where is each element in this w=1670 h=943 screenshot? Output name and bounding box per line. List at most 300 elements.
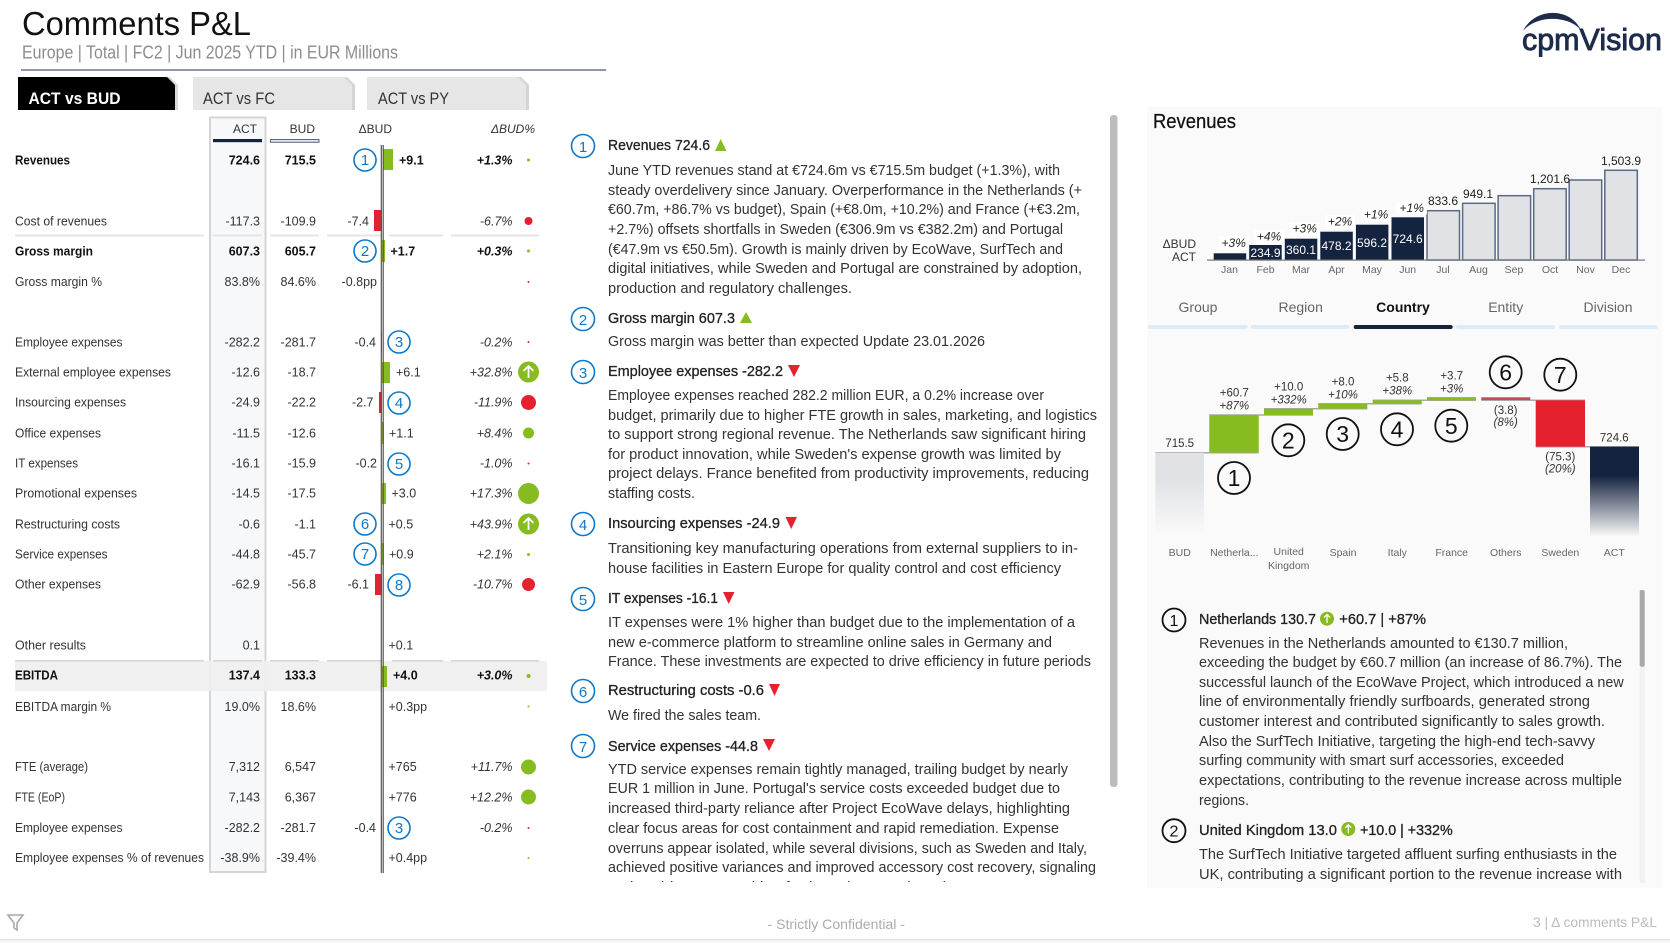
total value labels	[1428, 154, 1641, 208]
comment: Netherlands: surfing community with smart surf accessories, exceeded	[1199, 753, 1564, 769]
tabs: breakdown dimension: Region	[1279, 299, 1323, 315]
comment 1: Revenues	[572, 134, 1082, 297]
comment 7: Service expenses: 7	[579, 739, 587, 756]
bridge category labels: Kingdom	[1268, 560, 1310, 572]
comment 1: Revenues: production and regulatory challenges.	[608, 281, 852, 297]
chart baseline	[1207, 260, 1645, 261]
row: Employee expenses: -0.4	[354, 336, 376, 350]
bridge value labels: +332%	[1271, 394, 1307, 406]
row: IT expenses: -16.1	[232, 456, 260, 470]
row: Employee expenses % of revenues: +0.4pp	[388, 851, 427, 865]
footer confidentiality note: - Strictly Confidential -	[768, 916, 905, 932]
row: Service expenses: +0.9	[389, 548, 414, 562]
comment 7: Service expenses: Service expenses -44.8	[608, 738, 758, 755]
comment: United Kingdom: The SurfTech Initiative targeted affluent surfing enthusiasts in the	[1199, 847, 1617, 863]
row: EBITDA: +3.0%	[477, 668, 512, 682]
panel: P&L table	[15, 118, 547, 873]
row separator above EBITDA	[15, 660, 539, 662]
icon: filter funnel	[8, 915, 23, 930]
month axis labels: Nov	[1576, 264, 1596, 276]
white value labels in bars: 596.2	[1357, 236, 1387, 250]
row: Gross margin	[15, 240, 530, 262]
comment 3: Employee expenses: for product innovation, while Sweden's expense growth was limited by	[608, 447, 1062, 463]
country comments scrollbar	[1640, 590, 1645, 883]
month axis labels: Sep	[1505, 264, 1523, 276]
bridge value labels: (8%)	[1494, 417, 1518, 429]
month axis labels: Feb	[1256, 264, 1275, 276]
country comments	[1162, 608, 1624, 883]
comment 6: Restructuring costs: We fired the sales team.	[608, 708, 761, 724]
row: Other expenses: Other expenses	[15, 578, 101, 592]
total value labels: 1,503.9	[1601, 154, 1641, 168]
row: FTE (average)	[15, 760, 536, 774]
comment 1: Revenues: €60.7m, +86.7% vs budget), Spain (+€8.0m, +10.2%) and France (+€3.2m,	[608, 202, 1080, 218]
comment: Netherlands: successful launch of the EcoWave Project, which introduced a new	[1199, 675, 1624, 691]
white value labels in bars	[1250, 232, 1423, 260]
row: Promotional expenses: +3.0	[392, 486, 416, 500]
bridge value labels: +10%	[1328, 389, 1358, 401]
bridge category labels: Italy	[1388, 547, 1408, 559]
comment: United Kingdom: United Kingdom 13.0	[1199, 822, 1337, 839]
row: Revenues: 724.6	[229, 154, 260, 168]
row: Service expenses: +2.1%	[477, 548, 512, 562]
row: Service expenses: Service expenses	[15, 548, 108, 562]
bridge category labels: Others	[1490, 547, 1521, 559]
title: Comments P&L	[22, 5, 251, 42]
comment: Netherlands: +60.7 | +87%	[1339, 611, 1426, 628]
row: EBITDA: 137.4	[229, 668, 260, 682]
table column headers: ΔBUD	[359, 122, 392, 136]
comment 1: Revenues: (€47.9m vs €50.5m). Growth is mainly driven by EcoWave, SurfTech and	[608, 242, 1063, 258]
row: Service expenses: -45.7	[288, 548, 316, 562]
row: Insourcing expenses: -24.9	[232, 396, 260, 410]
comment 3: Employee expenses: budget, primarily due to higher FTE growth in sales, marketing, and logistics	[608, 408, 1097, 424]
header rule	[21, 69, 606, 71]
row: Office expenses: -12.6	[288, 426, 316, 440]
row: FTE (average): 7,312	[229, 760, 260, 774]
actual bars	[1214, 217, 1424, 260]
comment: Netherlands: exceeding the budget by €60.7 million (an increase of 86.7%). The	[1199, 655, 1622, 671]
comment 2: Gross margin: 2	[579, 312, 587, 329]
row: Cost of revenues: -6.7%	[480, 214, 512, 228]
tab: ACT vs PY	[367, 77, 529, 110]
legend labels	[1163, 237, 1197, 264]
row: IT expenses: 5	[395, 456, 403, 473]
table column headers: ΔBUD%	[490, 122, 535, 136]
comment 7: Service expenses: achieved positive variances and improved accessory cost recovery, signaling	[608, 860, 1096, 876]
delta percent labels: +3%	[1293, 222, 1317, 236]
row: Employee expenses: -281.7	[281, 336, 316, 350]
row: IT expenses: IT expenses	[15, 456, 78, 470]
month axis labels: Dec	[1612, 264, 1630, 276]
comment: Netherlands: 1	[1170, 613, 1179, 630]
row: Employee expenses: -0.2%	[480, 336, 512, 350]
bridge value labels: (3.8)	[1494, 405, 1518, 417]
row: FTE (EoP): +12.2%	[470, 790, 512, 804]
bridge value labels: (20%)	[1545, 464, 1576, 476]
comment: United Kingdom: UK, contributing a significant portion to the revenue increase with	[1199, 867, 1622, 883]
comment: Netherlands: Also the SurfTech Initiative, targeting the high-end tech-savvy	[1199, 734, 1596, 750]
row: Revenues: 1	[361, 152, 369, 169]
bridge category labels: United	[1274, 546, 1304, 558]
row: FTE (average): 6,547	[285, 760, 316, 774]
bridge value labels: +3%	[1440, 384, 1463, 396]
numbered markers: 4	[1391, 416, 1404, 442]
row: Revenues	[15, 149, 530, 171]
row: Insourcing expenses: -11.9%	[474, 396, 512, 410]
comment 5: IT expenses	[572, 588, 1091, 670]
bridge category labels: France	[1435, 547, 1468, 559]
row: Cost of revenues: -109.9	[281, 214, 316, 228]
delta percent labels: +2%	[1328, 215, 1353, 229]
bridge category labels	[1169, 546, 1625, 572]
row: Employee expenses memo: -282.2	[225, 821, 260, 835]
row: IT expenses: -0.2	[355, 456, 377, 470]
month axis labels	[1221, 264, 1630, 276]
row: EBITDA margin %: 18.6%	[281, 700, 316, 714]
row: Cost of revenues: -7.4	[347, 214, 369, 228]
comment 5: IT expenses: France. These investments are expected to drive efficiency in future periods	[608, 654, 1091, 670]
bridge category labels: BUD	[1169, 547, 1191, 559]
row: Promotional expenses: -14.5	[232, 486, 260, 500]
comment 7: Service expenses: clear focus areas for cost containment and rapid remediation. Expense	[608, 821, 1059, 837]
row: EBITDA margin %: 19.0%	[225, 700, 260, 714]
row: Revenues: Revenues	[15, 154, 70, 168]
numbered markers: 1	[1228, 465, 1240, 491]
month axis labels: Jan	[1221, 264, 1238, 276]
row: IT expenses: -15.9	[288, 456, 316, 470]
row: Service expenses: 7	[361, 546, 369, 563]
row: Restructuring costs: Restructuring costs	[15, 518, 120, 532]
row: EBITDA: +4.0	[393, 668, 418, 682]
row: FTE (average): +11.7%	[471, 760, 512, 774]
row: Restructuring costs	[15, 513, 539, 535]
comment 5: IT expenses: new e-commerce platform to streamline online sales in Germany and	[608, 635, 1052, 651]
row: Promotional expenses: -17.5	[288, 486, 316, 500]
row: FTE (average): +765	[388, 760, 417, 774]
row: Restructuring costs: -1.1	[294, 518, 316, 532]
bridge value labels: +10.0	[1274, 382, 1303, 394]
chart: monthly revenue columns	[1163, 154, 1645, 276]
subtitle: Europe | Total | FC2 | Jun 2025 YTD | in EUR Millions	[22, 42, 398, 62]
tab: ACT vs BUD	[18, 77, 178, 110]
logo: cpmVision: cpmVision	[1522, 22, 1662, 57]
row: Gross margin %: -0.8pp	[342, 275, 377, 289]
row: EBITDA margin %: EBITDA margin %	[15, 700, 111, 714]
numbered markers	[1218, 356, 1576, 494]
row: Promotional expenses	[15, 483, 539, 504]
numbered markers: 7	[1554, 362, 1567, 388]
comment 5: IT expenses: 5	[579, 592, 587, 609]
budget bars	[1427, 170, 1637, 260]
bridge category labels: Spain	[1330, 547, 1357, 559]
comment: Netherlands: regions.	[1199, 793, 1249, 809]
row: External employee expenses	[15, 362, 539, 383]
row: Gross margin: 2	[361, 243, 369, 260]
EBITDA row band	[15, 661, 547, 691]
row: EBITDA	[15, 666, 530, 687]
comment 5: IT expenses: IT expenses were 1% higher than budget due to the implementation of a	[608, 615, 1076, 631]
comment 6: Restructuring costs: Restructuring costs -0.6	[608, 682, 764, 699]
row: Employee expenses memo: -0.2%	[480, 821, 512, 835]
month axis labels: Oct	[1542, 264, 1558, 276]
tabs: breakdown dimension: Country	[1376, 299, 1430, 315]
bridge category labels: ACT	[1604, 547, 1625, 559]
chart: revenue bridge by country	[1155, 356, 1639, 572]
row: Office expenses: Office expenses	[15, 426, 101, 440]
bridge value labels: +38%	[1382, 385, 1412, 397]
row: Other results: +0.1	[388, 638, 413, 652]
comment 5: IT expenses: IT expenses -16.1	[608, 590, 718, 607]
comment 3: Employee expenses: 3	[579, 365, 587, 382]
row: External employee expenses: +6.1	[396, 366, 421, 380]
comment: Netherlands: Netherlands 130.7	[1199, 611, 1316, 628]
row: Gross margin: Gross margin	[15, 244, 93, 258]
comment 1: Revenues: +2.7%) offsets shortfalls in Sweden (€306.9m vs €382.2m) and Portugal	[608, 222, 1063, 238]
comment: United Kingdom: 2	[1170, 824, 1179, 841]
row: External employee expenses: +32.8%	[470, 366, 512, 380]
row: Employee expenses memo	[15, 817, 530, 839]
tab: ACT vs PY: ACT vs PY	[378, 89, 449, 108]
month axis labels: Jun	[1399, 264, 1416, 276]
numbered markers: 2	[1282, 428, 1295, 454]
row: Employee expenses memo: -281.7	[281, 821, 316, 835]
panel heading: Revenues	[1153, 111, 1236, 133]
numbered markers: 3	[1336, 421, 1349, 447]
row: External employee expenses: -18.7	[288, 366, 316, 380]
row: Insourcing expenses: Insourcing expenses	[15, 396, 126, 410]
comment 1: Revenues: steady overdelivery since January. Overperformance in the Netherlands (+	[608, 183, 1082, 199]
comment 3: Employee expenses: project delays. France benefited from productivity improvements, reducing	[608, 466, 1089, 482]
row: Restructuring costs: +43.9%	[470, 518, 512, 532]
tabs: breakdown dimension: Division	[1583, 299, 1633, 315]
row: EBITDA: 133.3	[285, 668, 316, 682]
row: Office expenses: +8.4%	[477, 426, 512, 440]
row: Gross margin %: 83.8%	[225, 275, 260, 289]
row: Insourcing expenses: -2.7	[352, 396, 374, 410]
comment 3: Employee expenses: to support strong regional revenue. The Netherlands saw significant hiring	[608, 427, 1086, 443]
row: Employee expenses: Employee expenses	[15, 336, 122, 350]
row: Revenues: +1.3%	[477, 154, 512, 168]
row: Promotional expenses: Promotional expenses	[15, 486, 137, 500]
comment 4: Insourcing expenses	[572, 512, 1078, 577]
row: Other expenses: -6.1	[347, 578, 369, 592]
row: EBITDA: EBITDA	[15, 668, 58, 682]
row: Employee expenses: 3	[395, 334, 403, 351]
row: Employee expenses	[15, 331, 530, 353]
delta percent labels: +1%	[1364, 208, 1389, 222]
comment 6: Restructuring costs: 6	[579, 684, 587, 701]
legend labels: ACT	[1172, 250, 1197, 264]
table column headers: ACT	[233, 122, 258, 136]
comments scrollbar	[1110, 115, 1118, 787]
row: Gross margin: +1.7	[390, 244, 415, 258]
row: Employee expenses % of revenues: Employee expenses % of revenues	[15, 851, 204, 865]
total value labels: 949.1	[1463, 187, 1493, 201]
comment 3: Employee expenses: Employee expenses -282.2	[608, 363, 783, 380]
row: Other expenses: -56.8	[288, 578, 316, 592]
row: Gross margin %: Gross margin %	[15, 275, 102, 289]
numbered markers: 5	[1445, 413, 1458, 439]
comment: Netherlands: expectations, contributing to the revenue increase across multiple	[1199, 773, 1622, 789]
comment 4: Insourcing expenses: 4	[579, 517, 587, 534]
row: FTE (EoP): 7,143	[229, 790, 260, 804]
white value labels in bars: 360.1	[1286, 243, 1316, 257]
comment 7: Service expenses: actionable opportunities for broader margin enhancement.	[608, 880, 1028, 896]
panel background	[1147, 107, 1662, 888]
row: Office expenses	[15, 422, 534, 444]
month axis labels: Jul	[1436, 264, 1450, 276]
row: Other results: Other results	[15, 638, 86, 652]
row: Insourcing expenses: 4	[395, 395, 403, 412]
white value labels in bars: 724.6	[1393, 232, 1423, 246]
delta percent labels: +3%	[1222, 236, 1246, 250]
row: Insourcing expenses: -22.2	[288, 396, 316, 410]
row separator under cost of revenues	[15, 234, 539, 236]
comment 1: Revenues: 1	[579, 139, 587, 156]
table column headers	[213, 122, 535, 142]
tabs: breakdown dimension: Entity	[1488, 299, 1523, 315]
total value labels: 1,201.6	[1530, 172, 1570, 186]
row: Office expenses: -11.5	[232, 426, 260, 440]
row: EBITDA margin %: +0.3pp	[388, 700, 427, 714]
bridge value labels: 724.6	[1600, 433, 1629, 445]
row: Restructuring costs: +0.5	[388, 518, 413, 532]
row: Other expenses: -10.7%	[473, 578, 512, 592]
comment 3: Employee expenses: Employee expenses reached 282.2 million EUR, a 0.2% increase over	[608, 388, 1044, 404]
row: EBITDA margin %	[15, 700, 530, 714]
row: Employee expenses % of revenues: -38.9%	[220, 851, 260, 865]
row: Gross margin: +0.3%	[477, 244, 512, 258]
comment 1: Revenues: June YTD revenues stand at €724.6m vs €715.5m budget (+1.3%), with	[608, 163, 1060, 179]
delta percent labels: +4%	[1257, 230, 1282, 244]
row: Gross margin: 605.7	[285, 244, 316, 258]
row: Restructuring costs: -0.6	[238, 518, 260, 532]
delta percent labels: +1%	[1400, 201, 1424, 215]
row: Other results: 0.1	[243, 638, 260, 652]
comment: Netherlands	[1162, 608, 1624, 809]
row: External employee expenses: -12.6	[232, 366, 260, 380]
row: FTE (EoP): FTE (EoP)	[15, 790, 65, 804]
bridge category labels: Sweden	[1541, 547, 1579, 559]
row: FTE (average): FTE (average)	[15, 760, 88, 774]
ACT column highlight	[210, 118, 266, 872]
bridge value labels: +3.7	[1440, 370, 1463, 382]
bridge value labels: +87%	[1219, 400, 1249, 412]
row: Other expenses: 8	[395, 577, 403, 594]
white value labels in bars: 478.2	[1321, 239, 1352, 253]
bridge value labels: 715.5	[1165, 438, 1194, 450]
row: Gross margin: 607.3	[229, 244, 260, 258]
bridge value labels: +8.0	[1332, 377, 1354, 389]
row: Gross margin %	[15, 275, 530, 289]
bridge value labels: +60.7	[1220, 388, 1249, 400]
row: FTE (EoP): 6,367	[285, 790, 316, 804]
row: Other results	[15, 638, 413, 652]
comment 7: Service expenses: increased third-party reliance after Project EcoWave delays, highlighting	[608, 801, 1070, 817]
comment 2: Gross margin	[572, 308, 985, 350]
bridge value labels: +5.8	[1386, 373, 1409, 385]
bridge category labels: Netherla...	[1210, 547, 1259, 559]
row: Cost of revenues: -117.3	[225, 214, 260, 228]
row: Cost of revenues	[15, 210, 532, 231]
legend labels: ΔBUD	[1163, 237, 1196, 251]
table column headers: BUD	[290, 122, 315, 136]
comment 2: Gross margin: Gross margin was better than expected Update 23.01.2026	[608, 334, 985, 350]
comment 4: Insourcing expenses: Transitioning key manufacturing operations from external suppliers to in-	[608, 541, 1078, 557]
row: Cost of revenues: Cost of revenues	[15, 214, 107, 228]
connector lines	[1155, 398, 1639, 453]
tab: ACT vs BUD: ACT vs BUD	[28, 89, 120, 108]
month axis labels: Aug	[1469, 264, 1488, 276]
row: Employee expenses memo: -0.4	[354, 821, 376, 835]
comment 7: Service expenses	[572, 734, 1096, 896]
delta percent labels	[1219, 201, 1427, 250]
tab: ACT vs FC: ACT vs FC	[203, 89, 275, 108]
tab: ACT vs FC	[193, 77, 355, 110]
row: Employee expenses memo: Employee expenses	[15, 821, 122, 835]
row: FTE (EoP): +776	[388, 790, 417, 804]
row: Other expenses: -62.9	[232, 578, 260, 592]
page label: 3 | Δ comments P&L	[1533, 914, 1657, 930]
row: Revenues: 715.5	[285, 154, 316, 168]
row: IT expenses: -1.0%	[480, 456, 512, 470]
row: Restructuring costs: 6	[361, 516, 369, 533]
comment: United Kingdom	[1162, 819, 1622, 883]
numbered markers: 6	[1499, 360, 1512, 386]
comment: Netherlands: Revenues in the Netherlands amounted to €130.7 million,	[1199, 636, 1568, 652]
footer band	[0, 939, 1670, 943]
comment 3: Employee expenses: staffing costs.	[608, 486, 695, 502]
comment 4: Insourcing expenses: house facilities in Eastern Europe for quality control and cost efficiency	[608, 561, 1062, 577]
panel: comments column	[572, 134, 1097, 896]
bridge bars	[1155, 398, 1639, 537]
comment 2: Gross margin: Gross margin 607.3	[608, 310, 735, 327]
row: Office expenses: +1.1	[389, 426, 414, 440]
comment 3: Employee expenses	[572, 360, 1097, 502]
row: Promotional expenses: +17.3%	[470, 486, 512, 500]
row: Service expenses: -44.8	[232, 548, 260, 562]
row: External employee expenses: External employee expenses	[15, 366, 171, 380]
row: Revenues: +9.1	[399, 154, 424, 168]
total value labels: 833.6	[1428, 194, 1458, 208]
month axis labels: May	[1362, 264, 1383, 276]
variance axis line	[381, 145, 384, 873]
comment: Netherlands: customer interest and contributed significantly to sales growth.	[1199, 714, 1605, 730]
tabs: breakdown dimension	[1148, 299, 1658, 329]
comment 4: Insourcing expenses: Insourcing expenses -24.9	[608, 515, 780, 532]
tabs: comparison selector	[18, 77, 529, 110]
comment 1: Revenues: Revenues 724.6	[608, 137, 710, 154]
row: Employee expenses % of revenues	[15, 851, 530, 865]
white value labels in bars: 234.9	[1250, 246, 1281, 260]
comment 7: Service expenses: EUR 1 million in June. Portugal's service costs exceeded budget due to	[608, 781, 1060, 797]
comment 1: Revenues: digital initiatives, while Sweden and Portugal are constrained by adoption,	[608, 261, 1082, 277]
row: Employee expenses % of revenues: -39.4%	[276, 851, 316, 865]
panel: Revenues	[1147, 107, 1662, 888]
comment 7: Service expenses: overruns appear isolated, while several divisions, such as Sweden and Italy,	[608, 841, 1087, 857]
bridge value labels: (75.3)	[1545, 452, 1575, 464]
comment 7: Service expenses: YTD service expenses remain tightly managed, trailing budget by nearly	[608, 762, 1069, 778]
month axis labels: Apr	[1328, 264, 1345, 276]
row: Gross margin %: 84.6%	[281, 275, 316, 289]
tabs: breakdown dimension: Group	[1179, 299, 1218, 315]
comment: Netherlands: line of environmentally friendly surfboards, generated strong	[1199, 694, 1590, 710]
row: FTE (EoP)	[15, 790, 536, 804]
bridge value labels	[1165, 370, 1629, 476]
row: Employee expenses: -282.2	[225, 336, 260, 350]
row: Insourcing expenses	[15, 392, 536, 414]
